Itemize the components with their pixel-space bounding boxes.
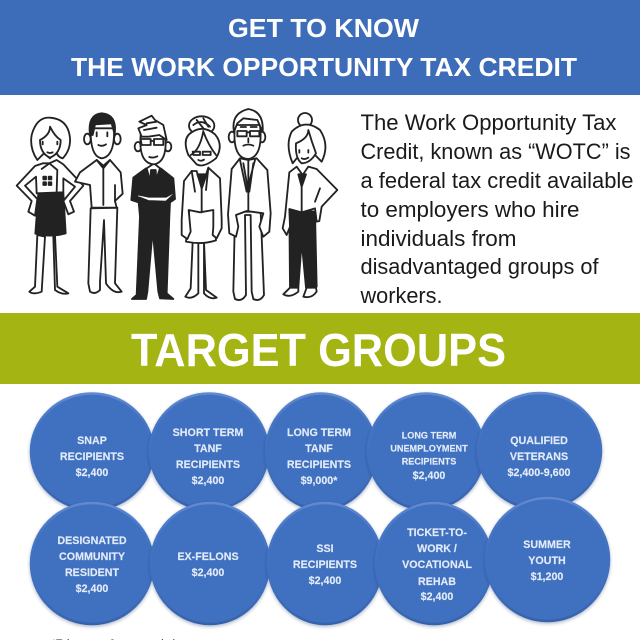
circle: long term unemployment recipients: UNEMPLOYMENT	[390, 444, 468, 454]
description text	[360, 110, 634, 308]
person 3: man in black suit	[131, 116, 175, 299]
circle: SNAP recipients	[31, 394, 153, 510]
circle: qualified veterans: $2,400-9,600	[508, 467, 571, 479]
description text: The Work Opportunity Tax	[360, 110, 616, 135]
title: THE WORK OPPORTUNITY TAX CREDIT	[71, 52, 577, 82]
circle: designated community resident: DESIGNATED	[57, 535, 127, 547]
circle: ex-felons: EX-FELONS	[177, 551, 239, 563]
circle: long term TANF recipients: TANF	[305, 443, 333, 455]
description text: Credit, known as “WOTC” is	[360, 139, 630, 164]
person 1: woman with black skirt	[17, 118, 83, 294]
section heading: TARGET GROUPS	[131, 324, 506, 376]
circle: long term unemployment recipients: $2,400	[413, 470, 445, 482]
circle: designated community resident: $2,400	[76, 583, 108, 595]
header banner	[0, 0, 640, 95]
section banner: target groups	[0, 313, 640, 384]
description text: a federal tax credit available	[360, 168, 634, 193]
circle: SSI recipients: SSI	[316, 543, 334, 555]
illustration: six business people	[17, 109, 337, 300]
person 6: woman with black trousers	[283, 113, 337, 297]
circle: ex-felons: $2,400	[192, 567, 224, 579]
circle: short term TANF recipients: $2,400	[192, 475, 224, 487]
circle: qualified veterans: VETERANS	[510, 451, 568, 463]
circle: qualified veterans	[478, 393, 601, 509]
circle: ticket-to-work / vocational rehab: TICKET-TO-	[407, 527, 467, 539]
circle: long term TANF recipients	[266, 394, 376, 510]
person 4: woman in jacket and white skirt	[182, 116, 222, 298]
circle: summer youth: YOUTH	[528, 555, 566, 567]
circle: SNAP recipients: $2,400	[76, 467, 108, 479]
circle: summer youth: $1,200	[531, 571, 563, 583]
description text: individuals from	[360, 226, 516, 251]
description text: to employers who hire	[360, 197, 580, 222]
circle: designated community resident: COMMUNITY	[59, 551, 125, 563]
circle: SSI recipients	[268, 503, 382, 624]
circle: short term TANF recipients: SHORT TERM	[173, 427, 243, 439]
circle: ex-felons	[151, 503, 269, 624]
circle: long term TANF recipients: LONG TERM	[287, 427, 351, 439]
circle: long term unemployment recipients	[368, 394, 484, 510]
circle: ticket-to-work / vocational rehab	[376, 503, 492, 624]
circle: ticket-to-work / vocational rehab: VOCATIONAL	[402, 559, 472, 571]
description text: workers.	[360, 283, 442, 308]
circle: short term TANF recipients: RECIPIENTS	[176, 459, 240, 471]
circle: SNAP recipients: SNAP	[77, 435, 107, 447]
circle: long term unemployment recipients: LONG TERM	[402, 430, 456, 440]
circle: SNAP recipients: RECIPIENTS	[60, 451, 124, 463]
person 5: older man in suit	[228, 109, 271, 300]
circle: designated community resident: RESIDENT	[65, 567, 119, 579]
title: GET TO KNOW	[228, 13, 419, 43]
circle: ticket-to-work / vocational rehab: REHAB	[418, 576, 456, 588]
circle: summer youth	[486, 498, 609, 621]
circle: SSI recipients: $2,400	[309, 575, 341, 587]
circle: ticket-to-work / vocational rehab: $2,400	[421, 591, 453, 603]
circle: short term TANF recipients: TANF	[194, 443, 222, 455]
circle: long term TANF recipients: RECIPIENTS	[287, 459, 351, 471]
circle: long term unemployment recipients: RECIPIENTS	[402, 456, 456, 466]
circle: long term TANF recipients: $9,000*	[301, 475, 338, 487]
circle: summer youth: SUMMER	[523, 539, 571, 551]
circle: SSI recipients: RECIPIENTS	[293, 559, 357, 571]
person 2: man in shirt	[75, 113, 123, 293]
circle: ticket-to-work / vocational rehab: WORK /	[417, 543, 457, 555]
circle: designated community resident	[31, 503, 153, 624]
circle: short term TANF recipients	[150, 394, 268, 510]
description text: disadvantaged groups of	[360, 254, 599, 279]
circle: qualified veterans: QUALIFIED	[510, 435, 568, 447]
title	[71, 13, 577, 82]
